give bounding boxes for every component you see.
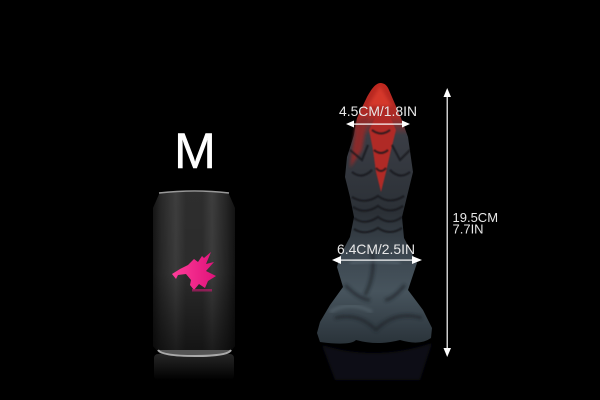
can reflection <box>154 354 234 380</box>
top width label: 4.5CM/1.8IN <box>339 103 417 119</box>
red stripe on the upper ridge <box>369 112 396 192</box>
height label: 19.5CM <box>452 210 498 225</box>
base width label: 6.4CM/2.5IN <box>337 241 415 257</box>
can bottom rim <box>158 350 231 356</box>
can top rim <box>159 191 229 193</box>
red tip highlight <box>368 86 392 106</box>
arrow: top width <box>346 120 410 128</box>
can reference object <box>153 191 235 380</box>
scale ridges <box>350 130 410 232</box>
arrow: base width <box>332 256 422 264</box>
icon: pink dragon logo <box>172 252 216 292</box>
product body <box>317 83 432 344</box>
base folds <box>335 250 422 330</box>
height label: 7.7IN <box>452 222 484 236</box>
product silhouette <box>317 83 432 380</box>
can body <box>153 192 235 354</box>
arrow: height <box>444 88 451 357</box>
red left highlight <box>350 116 368 168</box>
base highlight <box>330 306 372 312</box>
reflection under base <box>322 343 432 380</box>
size label: M: M <box>174 123 216 179</box>
